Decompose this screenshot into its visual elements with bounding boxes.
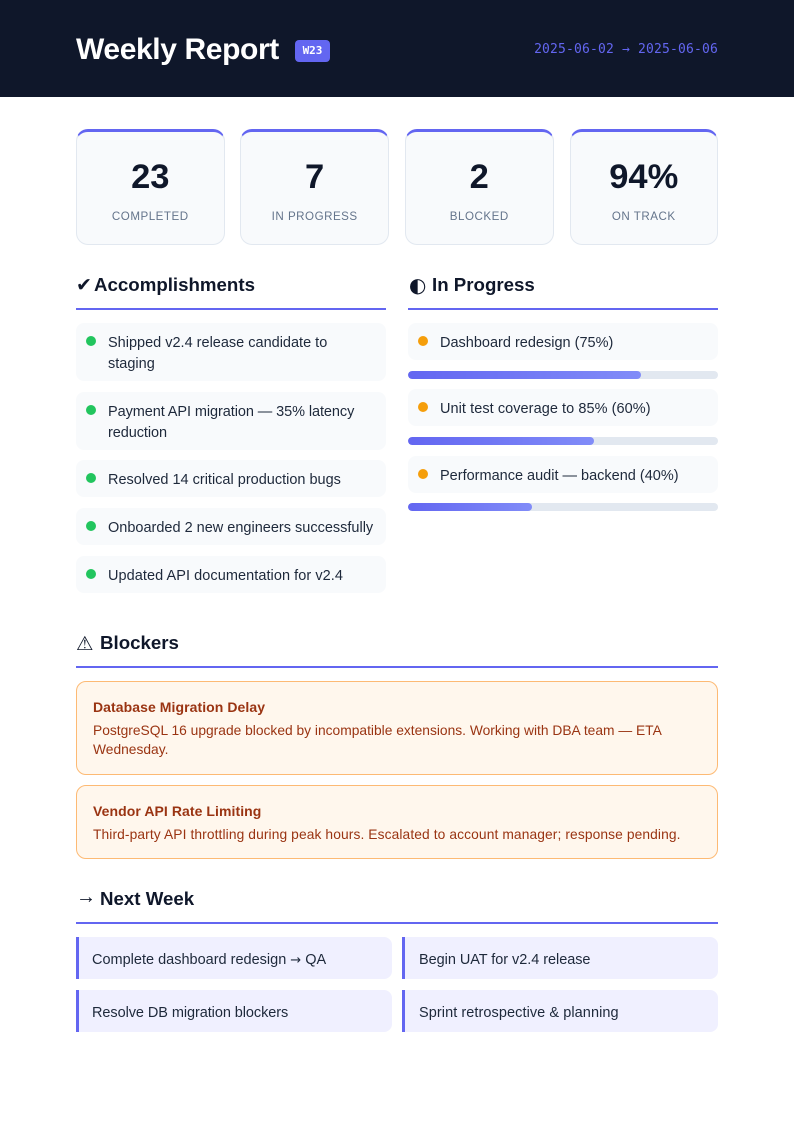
progress bar: 75%	[408, 371, 718, 379]
next step: retrospective	[402, 990, 718, 1032]
step text: Begin UAT for v2.4 release	[419, 952, 590, 968]
item text: reduction	[108, 425, 167, 441]
blocker: vendor API	[76, 785, 718, 859]
next step: DB migration	[76, 990, 392, 1032]
next step: UAT	[402, 937, 718, 979]
week badge	[295, 40, 330, 62]
status dot	[418, 336, 428, 346]
date range: 2025-06-02 → 2025-06-06	[534, 42, 718, 57]
item text: Updated API documentation for v2.4	[108, 568, 343, 584]
status dot	[86, 336, 96, 346]
heading: accomplishments: ✔	[76, 274, 92, 296]
next step: dashboard QA	[76, 937, 392, 979]
step text: Sprint retrospective & planning	[419, 1005, 619, 1021]
blocker: database migration	[76, 681, 718, 775]
item text	[108, 404, 354, 441]
stat value: 7	[305, 158, 324, 196]
item text: Resolved 14 critical production bugs	[108, 472, 341, 488]
status dot	[418, 469, 428, 479]
status dot	[418, 402, 428, 412]
stat card: in progress	[240, 129, 389, 245]
panel: accomplishments	[76, 274, 386, 584]
status dot	[86, 569, 96, 579]
title: Weekly Report	[76, 33, 279, 66]
blocker description: PostgreSQL 16 upgrade blocked by incompatible extensions. Working with DBA team — ETA	[93, 722, 662, 738]
blocker description	[93, 722, 662, 757]
item text: staging	[108, 356, 155, 372]
status dot	[86, 405, 96, 415]
item: documentation	[76, 556, 386, 593]
blocker description: Third-party API throttling during peak hours. Escalated to account manager; response pending.	[93, 826, 681, 842]
stat label: COMPLETED	[112, 210, 189, 223]
stat card: blocked	[405, 129, 554, 245]
heading: in progress: In Progress	[432, 274, 535, 295]
item text: Onboarded 2 new engineers successfully	[108, 520, 373, 536]
heading: blockers: ⚠	[76, 632, 93, 655]
heading: next week: →	[76, 886, 96, 908]
item: onboarding	[76, 508, 386, 545]
stat label: IN PROGRESS	[272, 210, 358, 223]
item text: Shipped v2.4 release candidate to	[108, 335, 327, 351]
heading: blockers: Blockers	[100, 632, 179, 653]
heading: accomplishments: Accomplishments	[94, 274, 255, 295]
item text: Payment API migration — 35% latency	[108, 404, 354, 420]
step text: Resolve DB migration blockers	[92, 1005, 288, 1021]
step text: Complete dashboard redesign → QA	[92, 952, 326, 968]
week badge: W23	[303, 44, 322, 57]
heading: in progress: ◐	[409, 273, 426, 297]
status dot	[86, 521, 96, 531]
item: dashboard redesign	[408, 323, 718, 360]
stat label: BLOCKED	[450, 210, 509, 223]
progress bar: 40%	[408, 503, 718, 511]
heading: next week: Next Week	[100, 888, 194, 909]
item text	[108, 335, 327, 372]
stat label: ON TRACK	[612, 210, 676, 223]
blocker description: Wednesday.	[93, 742, 168, 757]
item text: Dashboard redesign (75%)	[440, 335, 613, 351]
item: unit test coverage	[408, 389, 718, 426]
stat value: 94%	[609, 158, 678, 196]
item: release candidate	[76, 323, 386, 381]
blocker title: Database Migration Delay	[93, 699, 265, 715]
item: payment API	[76, 392, 386, 450]
stat card: completed	[76, 129, 224, 245]
item: performance audit	[408, 456, 718, 493]
progress bar: 60%	[408, 437, 718, 445]
item: production bugs	[76, 460, 386, 497]
item text: Performance audit — backend (40%)	[440, 468, 679, 484]
blocker title: Vendor API Rate Limiting	[93, 803, 261, 819]
stat value: 2	[470, 158, 489, 196]
stat value: 23	[131, 158, 169, 196]
header banner	[0, 0, 794, 97]
item text: Unit test coverage to 85% (60%)	[440, 401, 651, 417]
stat card: on track	[570, 129, 718, 245]
status dot	[86, 473, 96, 483]
